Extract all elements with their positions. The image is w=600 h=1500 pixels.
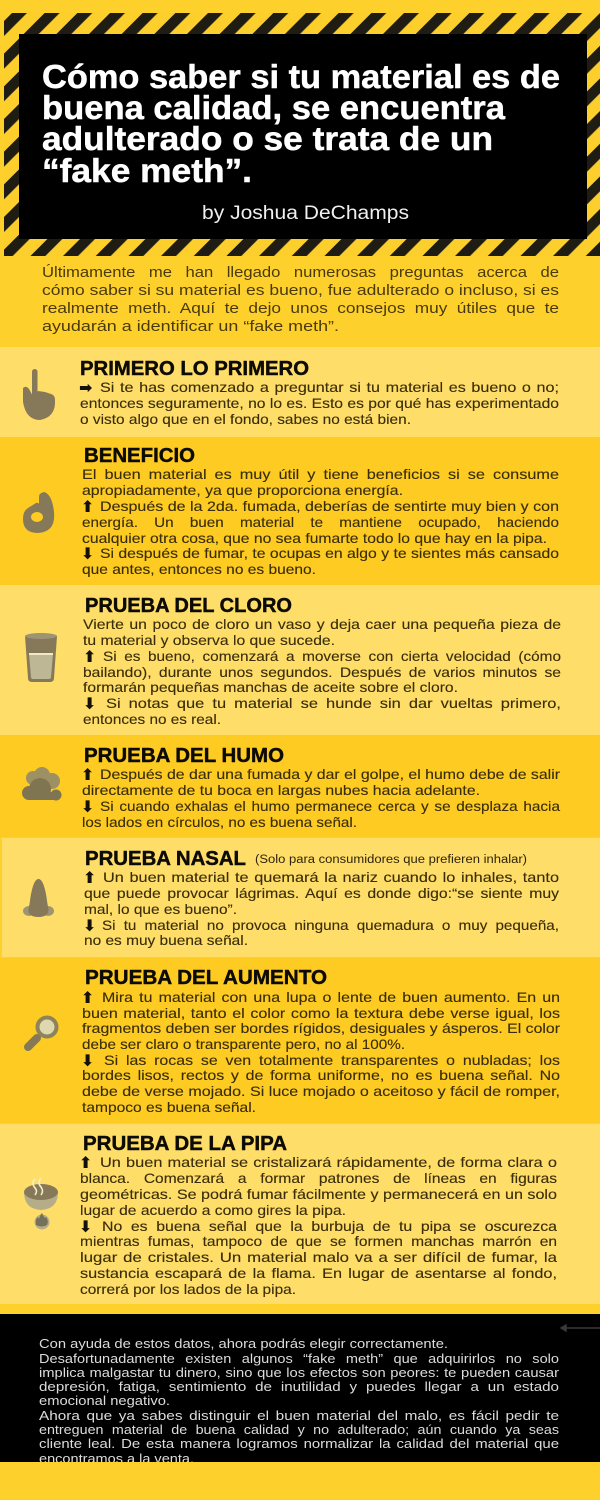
byline: by Joshua DeChamps <box>202 203 409 224</box>
text block: lugar de cristales. Un material malo va a ser difícil de fumar, la <box>80 1249 557 1265</box>
text block <box>83 868 559 948</box>
text block: bordes lisos, rectos y de forma uniforme, no es buena señal. No <box>82 1067 560 1083</box>
icon: pointing hand <box>23 369 55 420</box>
closing text: Ahora que ya sabes distinguir el buen material del malo, es fácil pedir te <box>39 1408 559 1423</box>
intro paragraph: cómo saber si su material es bueno, fue adulterado o incluso, si es <box>42 282 559 299</box>
text block: que antes, entonces no es bueno. <box>82 561 316 577</box>
closing text: encontramos a la venta. <box>39 1451 194 1466</box>
text block: Un buen material se cristalizará rápidamente, de forma clara o <box>100 1154 557 1170</box>
closing text <box>39 1336 560 1466</box>
closing text: entreguen material de buena calidad y no adulterado; aún cuando ya seas <box>39 1422 560 1437</box>
icon: nose <box>23 879 54 917</box>
text block: Después de la 2da. fumada, deberías de sentirte muy bien y con <box>100 498 559 514</box>
title: Cómo saber si tu material es de <box>42 58 560 95</box>
text block: ⬇ <box>83 916 96 935</box>
text block: debe de verse mojado. Si luce mojado o aceitoso y fácil de romper, <box>82 1083 560 1099</box>
text block <box>81 765 560 830</box>
closing text: cliente leal. De esta manera logramos normalizar la calidad del material que <box>39 1436 559 1451</box>
text block: Después de dar una fumada y dar el golpe, el humo debe de salir <box>100 766 560 782</box>
text block: ⬇ <box>81 544 94 563</box>
title: “fake meth”. <box>42 152 252 189</box>
text block: fragmentos deben ser bordes rígidos, desiguales y ásperos. El color <box>82 1020 560 1036</box>
text block: geométricas. Se podrá fumar fácilmente y permanecerá en un solo <box>80 1186 557 1202</box>
text block: Si te has comenzado a preguntar si tu material es bueno o no; <box>100 379 559 395</box>
heading: PRUEBA DE LA PIPA <box>83 1132 287 1155</box>
text block: tampoco es buena señal. <box>82 1099 256 1115</box>
heading: PRUEBA NASAL <box>85 847 246 870</box>
icon: ok hand <box>23 492 54 533</box>
intro paragraph: realmente meth. Aquí te dejo unos consejos muy útiles que te <box>42 300 559 317</box>
title <box>42 58 560 189</box>
text block: tu material y observa lo que sucede. <box>83 632 335 648</box>
panel: prueba nasal <box>2 838 600 957</box>
text block: mientras fumas, tampoco de que se formen manchas marrón en <box>80 1233 557 1249</box>
text block: Si notas que tu material se hunde sin dar vueltas primero, <box>106 695 561 711</box>
icon: glass of bleach <box>25 633 57 682</box>
text block: ⬇ <box>79 1217 92 1236</box>
text block: Un buen material te quemará la nariz cuando lo inhales, tanto <box>103 869 559 885</box>
text block <box>83 616 561 727</box>
text block: entonces seguramente, no lo es. Esto es por qué has experimentado <box>80 395 559 411</box>
panel: prueba del cloro <box>0 585 600 735</box>
text block: El buen material es muy útil y tiene beneficios si se consume <box>82 466 559 482</box>
text block: cualquier otra cosa, que no sea fumarte todo lo que hay en la pipa. <box>82 530 547 546</box>
text block <box>79 378 559 427</box>
panel: beneficio <box>0 437 600 585</box>
text block: blanca. Comenzará a formar patrones de líneas en figuras <box>80 1170 557 1186</box>
panel: primero lo primero <box>0 347 600 437</box>
text block: formarán pequeñas manchas de aceite sobre el cloro. <box>83 679 458 695</box>
heading: PRUEBA DEL HUMO <box>84 744 284 767</box>
text block: Si las rocas se ven totalmente transparentes o nubladas; los <box>104 1052 560 1068</box>
title: adulterado o se trata de un <box>42 120 493 157</box>
text block: Si cuando exhalas el humo permanece cerca y se desplaza hacia <box>100 798 560 814</box>
text block: Si tu material no provoca ninguna quemadura o muy pequeña, <box>102 917 559 933</box>
text block: Si después de fumar, te ocupas en algo y te sientes más cansado <box>100 545 559 561</box>
text block: ⬆ <box>81 497 94 516</box>
text block: ⬇ <box>83 694 96 713</box>
text block: Si es bueno, comenzará a moverse con cierta velocidad (cómo <box>103 648 561 664</box>
text block: debe ser claro o transparente pero, no al 100%. <box>82 1036 405 1052</box>
text block: lugar de acuerdo a como gires la pipa. <box>80 1202 346 1218</box>
closing text: implica malgastar tu dinero, sino que los efectos son peores: te pueden causar <box>39 1365 560 1380</box>
text block: ➡ <box>79 378 92 397</box>
closing text: Desafortunadamente existen algunos “fake meth” que adquirirlos no solo <box>39 1351 559 1366</box>
text block: directamente de tu boca en largas nubes hacia adelante. <box>82 782 480 798</box>
text block: No es buena señal que la burbuja de tu pipa se oscurezca <box>102 1218 557 1234</box>
header: hazard-striped title banner <box>4 13 600 256</box>
text block: ⬇ <box>81 1051 94 1070</box>
text block <box>79 1153 557 1297</box>
text block: buen material, tanto el color como la textura debe verse igual, los <box>82 1005 560 1021</box>
text block: ⬆ <box>81 765 94 784</box>
text block: no es muy buena señal. <box>84 932 248 948</box>
icon: smoke cloud <box>22 767 62 800</box>
closing text: Con ayuda de estos datos, ahora podrás elegir correctamente. <box>39 1336 448 1351</box>
text block: los lados en círculos, no es buena señal. <box>82 814 357 830</box>
text block: mal, lo que es bueno”. <box>84 901 237 917</box>
closing text: emocional negativo. <box>39 1393 170 1408</box>
text block: ⬆ <box>81 988 94 1007</box>
text block: energía. Un buen material te mantiene ocupado, haciendo <box>82 514 559 530</box>
text block: que puede provocar lágrimas. Aquí es donde digo:“se siente muy <box>84 885 559 901</box>
text block: entonces no es real. <box>83 711 221 727</box>
panel: prueba del aumento <box>0 958 600 1123</box>
panel: prueba de la pipa <box>0 1124 600 1304</box>
text block: Vierte un poco de cloro un vaso y deja caer una pequeña pieza de <box>83 616 561 632</box>
heading: BENEFICIO <box>84 444 195 467</box>
text block: sustancia escapará de la flama. En lugar de asentarse al fondo, <box>80 1265 557 1281</box>
text block: bailando), durante unos segundos. Después de varios minutos se <box>83 664 561 680</box>
intro paragraph <box>42 264 559 335</box>
text block: correrá por los lados de la pipa. <box>80 1281 296 1297</box>
note: (Solo para consumidores que prefieren inhalar) <box>255 854 527 866</box>
text block: ⬆ <box>83 868 96 887</box>
text block <box>81 466 559 577</box>
text block: ⬆ <box>79 1153 92 1172</box>
title: buena calidad, se encuentra <box>42 89 506 126</box>
arrow <box>561 1325 600 1331</box>
text block: ⬆ <box>83 647 96 666</box>
text block: apropiadamente, ya que proporciona energía. <box>82 482 403 498</box>
text block: o visto algo que en el fondo, sabes no está bien. <box>80 411 411 427</box>
icon: magnifying glass <box>28 1018 56 1047</box>
text block: Mira tu material con una lupa o lente de buen aumento. En un <box>102 989 560 1005</box>
intro paragraph: ayudarán a identificar un “fake meth”. <box>42 318 339 335</box>
text block <box>81 988 560 1115</box>
icon: pipe bowl over flame <box>24 1178 58 1230</box>
closing text: depresión, fatiga, sentimiento de inutilidad y puedes llegar a un estado <box>39 1379 559 1394</box>
heading: PRUEBA DEL AUMENTO <box>85 966 327 989</box>
panel: closing black section <box>0 1314 600 1466</box>
panel: prueba del humo <box>0 735 600 837</box>
heading: PRIMERO LO PRIMERO <box>80 357 309 380</box>
intro paragraph: Últimamente me han llegado numerosas preguntas acerca de <box>42 264 559 281</box>
heading: PRUEBA DEL CLORO <box>85 594 292 617</box>
text block: ⬇ <box>81 797 94 816</box>
